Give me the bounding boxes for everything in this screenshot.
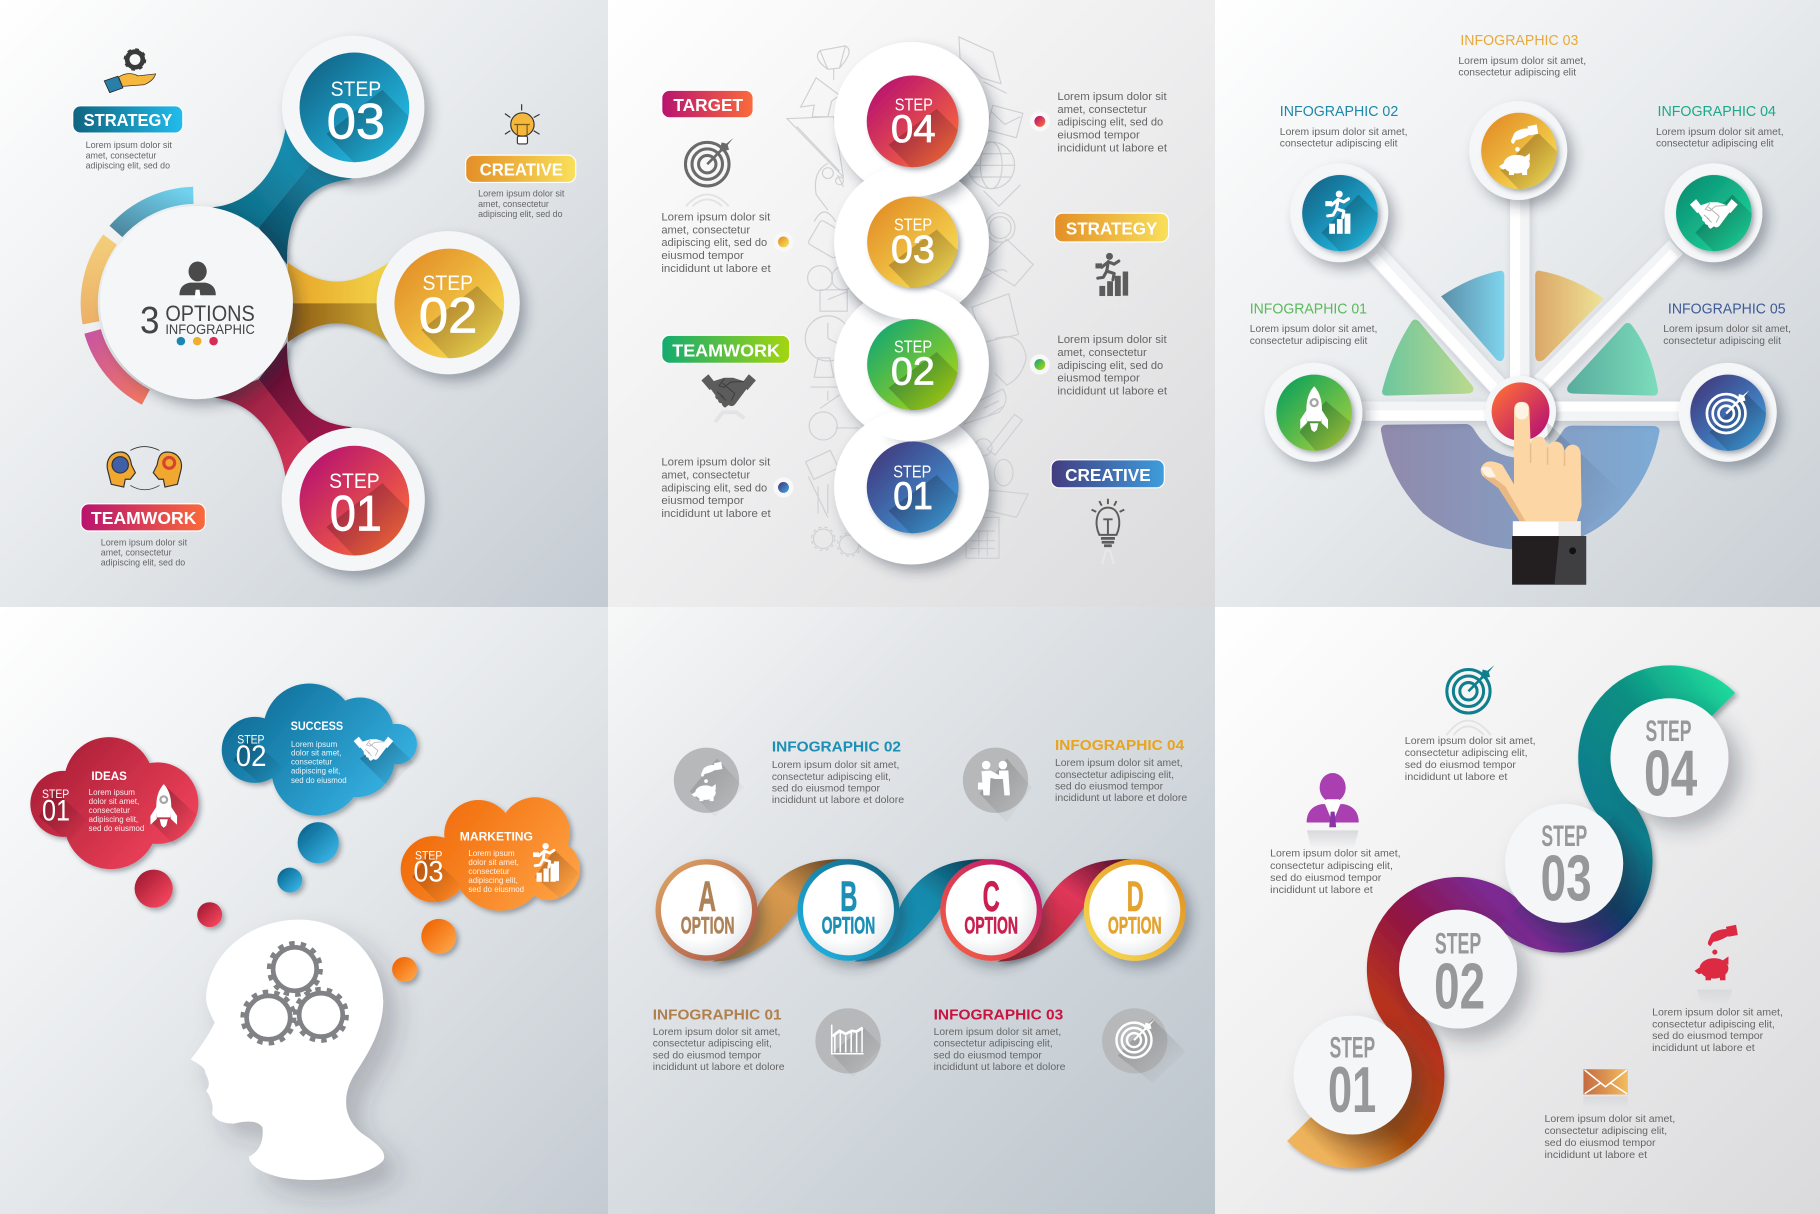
label: creative: CREATIVE: [480, 160, 563, 179]
text: infographic 01: INFOGRAPHIC 01: [1250, 301, 1367, 318]
text: left: sed do eiusmod tempor: [1270, 873, 1382, 884]
gears: [243, 943, 347, 1043]
text: top: consectetur adipiscing elit,: [1405, 748, 1527, 759]
step 01 button: STEP: [329, 469, 380, 493]
icon: envelope: [1583, 1069, 1628, 1107]
cloud: marketing: MARKETING: [460, 830, 533, 843]
step 03 button: STEP: [331, 77, 381, 101]
heading and text: infographic 03: INFOGRAPHIC 03: [934, 1008, 1063, 1024]
option C: OPTION: [964, 913, 1018, 940]
text: infographic 04: consectetur adipiscing elit: [1656, 139, 1774, 150]
cloud: ideas: adipiscing elit,: [89, 815, 138, 824]
label: target: [662, 90, 753, 118]
icon: light bulb: [505, 104, 540, 144]
heading and text: infographic 04: sed do eiusmod tempor: [1055, 782, 1164, 793]
text: right upper: incididunt ut labore et: [1057, 142, 1168, 154]
cloud: ideas: dolor sit amet,: [89, 797, 139, 806]
step 02 button: STEP: [422, 271, 473, 295]
option B: OPTION: [822, 913, 875, 940]
colored dots: [177, 337, 218, 345]
option C: C: [983, 873, 1000, 921]
step 04 badge: 04: [891, 108, 936, 151]
label: target: TARGET: [673, 96, 744, 115]
text: bottom: sed do eiusmod tempor: [1544, 1138, 1656, 1149]
dot: green: [1030, 354, 1050, 375]
text: infographic 04: Lorem ipsum dolor sit amet,: [1656, 127, 1784, 138]
text: right upper: eiusmod tempor: [1057, 129, 1140, 141]
panel background: metaball steps: [0, 0, 608, 607]
text: right upper: adipiscing elit, sed do: [1057, 117, 1163, 129]
step 02 badge: [867, 319, 981, 433]
label: strategy: STRATEGY: [84, 111, 173, 130]
panel: options ribbon: [653, 738, 1187, 1083]
heading and text: infographic 03: sed do eiusmod tempor: [934, 1050, 1042, 1061]
text: right upper: [1057, 91, 1168, 154]
text: right lower: adipiscing elit, sed do: [1057, 360, 1163, 372]
step 02 disc: [1399, 910, 1517, 1028]
heading and text: infographic 02: incididunt ut labore et dolore: [772, 795, 904, 806]
text: infographic 03: INFOGRAPHIC 03: [1460, 33, 1578, 49]
heading and text: infographic 04: incididunt ut labore et dolore: [1055, 793, 1187, 804]
ribbon: C to D: [997, 859, 1133, 962]
label: creative: [1051, 460, 1164, 488]
step 02 button: 02: [419, 288, 477, 344]
text: infographic 05: consectetur adipiscing elit: [1663, 336, 1781, 347]
text: infographic 01: consectetur adipiscing elit: [1250, 336, 1367, 347]
wedge: blue: [1441, 271, 1504, 361]
white chain circles: [834, 42, 989, 564]
option B: B: [840, 873, 857, 921]
step 01 badge: [867, 442, 981, 555]
step 01 disc: 01: [1328, 1053, 1376, 1126]
text: left lower: Lorem ipsum dolor sit: [661, 457, 771, 469]
text: left lower: incididunt ut labore et: [661, 508, 772, 520]
text: top: incididunt ut labore et: [1405, 772, 1508, 783]
central circle: [100, 206, 293, 399]
step 04 badge: [866, 75, 964, 173]
text: infographic 04: [1656, 104, 1784, 150]
text: left: incididunt ut labore et: [1270, 885, 1373, 896]
step 02 button: [377, 231, 533, 387]
cloud: ideas: consectetur: [89, 806, 130, 815]
center button: [1485, 376, 1556, 447]
option C: [940, 859, 1042, 961]
icon circle: business people: [963, 748, 1032, 823]
wedge: teal: [1567, 323, 1658, 396]
icon: hand with gear: [104, 50, 156, 93]
step 04 badge: STEP: [895, 95, 933, 114]
text: left lower: eiusmod tempor: [661, 495, 744, 507]
panel: five-spoke hand button: [1250, 33, 1791, 585]
text: infographic 03: consectetur adipiscing elit: [1458, 67, 1576, 78]
connector: step 02 gold: [288, 263, 389, 342]
spoke highlights: [1365, 198, 1682, 415]
panel background: hand button fan: [1215, 0, 1820, 607]
step 01 button: 01: [330, 486, 382, 542]
cloud: ideas: sed do eiusmod: [89, 824, 145, 833]
panel background: options ribbon: [608, 607, 1215, 1214]
text: top: sed do eiusmod tempor: [1405, 760, 1516, 771]
step 03 disc: STEP: [1541, 820, 1587, 853]
step 03 badge: 03: [891, 229, 935, 272]
heading and text: infographic 01: INFOGRAPHIC 01: [653, 1008, 782, 1024]
icon circle: piggy bank: [674, 748, 744, 817]
cloud: marketing: dolor sit amet,: [468, 858, 519, 867]
text: right lower: Lorem ipsum dolor sit: [1057, 334, 1168, 346]
text: teamwork body: amet, consectetur: [101, 547, 172, 557]
icon: target: [685, 138, 733, 206]
cloud: ideas: IDEAS: [91, 770, 127, 783]
text: top: [1405, 736, 1536, 783]
text: creative body: amet, consectetur: [478, 199, 549, 209]
text: infographic 02: INFOGRAPHIC 02: [1280, 104, 1398, 120]
central title: INFOGRAPHIC: [165, 321, 255, 337]
panel: vertical chain of steps: [661, 37, 1169, 564]
text: infographic 02: Lorem ipsum dolor sit amet,: [1280, 127, 1408, 138]
option D: OPTION: [1108, 913, 1162, 940]
text: infographic 03: [1458, 33, 1586, 78]
text: infographic 02: consectetur adipiscing elit: [1280, 139, 1398, 150]
text: top: Lorem ipsum dolor sit amet,: [1405, 736, 1536, 747]
cloud: ideas: 01: [42, 795, 70, 828]
icon: runner and bars: [1095, 253, 1128, 309]
heading and text: infographic 03: [934, 1008, 1066, 1073]
thought drops: red: [135, 870, 222, 927]
text: teamwork body: adipiscing elit, sed do: [101, 558, 185, 568]
heading and text: infographic 01: Lorem ipsum dolor sit amet,: [653, 1027, 780, 1038]
text: right lower: [1057, 334, 1168, 397]
text: right lower: eiusmod tempor: [1057, 373, 1140, 385]
text: left upper: incididunt ut labore et: [661, 263, 772, 275]
icon: light bulb: [1092, 499, 1124, 564]
connector: step 03 teal: [212, 126, 352, 265]
text: left upper: Lorem ipsum dolor sit: [661, 212, 771, 224]
thought drops: blue: [277, 822, 339, 892]
text: infographic 01: Lorem ipsum dolor sit amet,: [1250, 324, 1377, 335]
cloud: success: Lorem ipsum: [291, 740, 337, 749]
text: infographic 01: [1250, 301, 1377, 347]
central title: [140, 299, 255, 342]
text: teamwork body: [101, 537, 188, 568]
panel background: head and clouds: [0, 607, 608, 1214]
cloud: success: [222, 683, 417, 816]
dot: red: [1030, 111, 1050, 131]
head silhouette: [191, 920, 384, 1180]
icon circle: chart: [815, 1008, 882, 1077]
text: creative body: adipiscing elit, sed do: [478, 209, 562, 219]
icon: purple person: [1307, 773, 1359, 849]
heading and text: infographic 03: incididunt ut labore et dolore: [934, 1062, 1066, 1073]
step 01 badge: STEP: [893, 462, 931, 481]
text: left upper: amet, consectetur: [661, 224, 750, 236]
heading and text: infographic 02: consectetur adipiscing elit,: [772, 772, 891, 783]
arc: red: [93, 331, 146, 397]
cloud: ideas: STEP: [42, 788, 69, 801]
text: bottom: Lorem ipsum dolor sit amet,: [1544, 1114, 1675, 1125]
label: strategy: [1055, 213, 1169, 242]
heading and text: infographic 02: Lorem ipsum dolor sit amet,: [772, 760, 899, 771]
text: left upper: [661, 212, 772, 275]
text: right upper: amet, consectetur: [1057, 104, 1147, 116]
text: infographic 05: INFOGRAPHIC 05: [1668, 301, 1786, 318]
cloud: success: sed do eiusmod: [291, 776, 347, 785]
ribbon: A to B: [712, 859, 847, 962]
cloud: success: STEP: [237, 734, 265, 747]
spokes: [1358, 191, 1684, 411]
icon: handshake: [701, 374, 756, 422]
heading and text: infographic 03: Lorem ipsum dolor sit amet,: [934, 1027, 1061, 1038]
jacket sleeve: [1512, 536, 1586, 585]
label: teamwork: [662, 335, 790, 363]
doodle background: [787, 37, 1033, 558]
arc: yellow: [89, 240, 110, 323]
text: right: consectetur adipiscing elit,: [1652, 1019, 1775, 1030]
heading and text: infographic 01: incididunt ut labore et dolore: [653, 1062, 785, 1073]
option A: OPTION: [681, 913, 734, 940]
wedge: orange: [1535, 271, 1604, 361]
cloud: marketing: adipiscing elit,: [468, 876, 518, 885]
cloud: ideas: [30, 737, 198, 869]
heading and text: infographic 02: [772, 739, 904, 806]
label: creative: [466, 155, 576, 182]
half ring wedge: [1381, 424, 1660, 549]
hand shadow: [1547, 422, 1624, 533]
text: right upper: Lorem ipsum dolor sit: [1057, 91, 1168, 103]
heading and text: infographic 04: INFOGRAPHIC 04: [1055, 738, 1185, 754]
text: strategy body: [86, 140, 172, 170]
snake ribbon: [1299, 683, 1723, 1151]
cloud: ideas: Lorem ipsum: [89, 788, 135, 797]
text: left: [1270, 849, 1401, 896]
text: right lower: amet, consectetur: [1057, 347, 1147, 359]
dot: gold: [773, 232, 794, 252]
step 03 button: 03: [327, 93, 385, 149]
step 02 disc: 02: [1434, 949, 1485, 1022]
icon circle: target: [1102, 1008, 1186, 1083]
central title: OPTIONS: [165, 301, 255, 326]
option D: [1084, 859, 1186, 961]
step 03 disc: 03: [1541, 841, 1592, 914]
label: teamwork: TEAMWORK: [672, 341, 781, 360]
text: strategy body: Lorem ipsum dolor sit: [86, 140, 172, 150]
text: left upper: eiusmod tempor: [661, 250, 744, 262]
panel: 3 options metaball infographic: [73, 36, 576, 584]
circle 03 piggy bank: [1469, 101, 1577, 209]
text: right: Lorem ipsum dolor sit amet,: [1652, 1007, 1783, 1018]
heading and text: infographic 04: consectetur adipiscing elit,: [1055, 770, 1174, 781]
text: left upper: adipiscing elit, sed do: [661, 237, 767, 249]
cloud: success: 02: [236, 740, 266, 773]
step 03 button: [282, 36, 438, 191]
text: right: sed do eiusmod tempor: [1652, 1031, 1764, 1042]
step 02 disc: STEP: [1435, 927, 1481, 961]
text: strategy body: adipiscing elit, sed do: [86, 160, 170, 170]
option A: A: [698, 873, 716, 921]
arc: teal: [116, 195, 193, 231]
text: strategy body: amet, consectetur: [86, 150, 156, 160]
step 03 badge: STEP: [894, 216, 932, 235]
text: teamwork body: Lorem ipsum dolor sit: [101, 537, 188, 547]
dot: navy: [773, 477, 794, 498]
heading and text: infographic 04: [1055, 738, 1187, 804]
text: left: Lorem ipsum dolor sit amet,: [1270, 849, 1401, 860]
connector: step 01 red: [212, 342, 352, 478]
ribbon: B to C: [854, 859, 990, 962]
panel background: snake steps: [1215, 607, 1820, 1214]
text: right: [1652, 1007, 1783, 1054]
panel background: vertical chain: [608, 0, 1215, 607]
heading and text: infographic 01: sed do eiusmod tempor: [653, 1050, 761, 1061]
text: infographic 04: INFOGRAPHIC 04: [1658, 104, 1776, 120]
cloud: marketing: sed do eiusmod: [468, 885, 524, 894]
heading and text: infographic 02: INFOGRAPHIC 02: [772, 739, 901, 755]
circle 04 handshake: [1664, 163, 1772, 272]
label: creative: CREATIVE: [1065, 466, 1151, 485]
circle 02 runner: [1290, 163, 1398, 272]
label: teamwork: [81, 504, 205, 531]
text: infographic 05: Lorem ipsum dolor sit amet,: [1663, 324, 1791, 335]
text: bottom: [1544, 1114, 1675, 1161]
text: infographic 02: [1280, 104, 1408, 150]
cloud: success: dolor sit amet,: [291, 749, 342, 758]
text: infographic 05: [1663, 301, 1791, 347]
cloud: marketing: STEP: [415, 849, 442, 862]
pointing hand: [1481, 402, 1582, 521]
icon: red piggy bank: [1694, 925, 1738, 1005]
heading and text: infographic 04: Lorem ipsum dolor sit amet,: [1055, 758, 1183, 769]
circle 01 rocket: [1264, 363, 1372, 471]
panel: snake steps: [1270, 665, 1783, 1161]
text: bottom: consectetur adipiscing elit,: [1544, 1126, 1667, 1137]
step 01 badge: 01: [893, 475, 933, 518]
text: infographic 03: Lorem ipsum dolor sit amet,: [1458, 56, 1586, 67]
wedge: green: [1382, 320, 1474, 396]
text: left lower: [661, 457, 772, 520]
cloud: success: adipiscing elit,: [291, 767, 340, 776]
cloud: success: consectetur: [291, 758, 332, 767]
text: right: incididunt ut labore et: [1652, 1043, 1755, 1054]
shirt cuff: [1513, 521, 1581, 536]
step 01 button: [282, 428, 438, 584]
step 03 disc: [1505, 804, 1623, 923]
step 04 disc: 04: [1644, 736, 1697, 809]
cloud: marketing: Lorem ipsum: [468, 849, 515, 858]
label: strategy: STRATEGY: [1066, 220, 1158, 239]
central title: 3: [140, 299, 159, 342]
text: creative body: [478, 188, 565, 219]
step 01 disc: [1294, 1016, 1412, 1135]
option B: [797, 859, 899, 961]
icon: two heads: [107, 447, 182, 490]
heading and text: infographic 01: consectetur adipiscing elit,: [653, 1039, 772, 1050]
step 03 badge: [867, 196, 981, 310]
thought drops: orange: [392, 919, 456, 982]
step 04 disc: STEP: [1646, 715, 1691, 748]
text: left lower: adipiscing elit, sed do: [661, 482, 767, 494]
step 04 disc: [1610, 698, 1728, 817]
step 02 badge: 02: [891, 350, 935, 393]
cloud: marketing: [401, 797, 580, 911]
label: teamwork: TEAMWORK: [91, 509, 197, 528]
cloud: marketing: consectetur: [468, 867, 510, 876]
icon: teal target: [1446, 665, 1494, 735]
text: left lower: amet, consectetur: [661, 469, 750, 481]
text: left: consectetur adipiscing elit,: [1270, 861, 1393, 872]
label: strategy: [73, 106, 183, 133]
option D: D: [1127, 873, 1144, 921]
heading and text: infographic 01: [653, 1008, 785, 1073]
text: creative body: Lorem ipsum dolor sit: [478, 188, 565, 198]
option A: [656, 859, 757, 961]
heading and text: infographic 02: sed do eiusmod tempor: [772, 783, 880, 794]
step 02 badge: STEP: [894, 337, 932, 356]
icon: businessman: [179, 262, 216, 299]
text: bottom: incididunt ut labore et: [1544, 1150, 1647, 1161]
cloud: success: SUCCESS: [291, 720, 343, 733]
cloud: marketing: 03: [414, 856, 443, 889]
step 01 disc: STEP: [1330, 1032, 1375, 1065]
circle 05 target: [1679, 363, 1786, 471]
panel: head with thought clouds: [30, 683, 580, 1180]
heading and text: infographic 03: consectetur adipiscing elit,: [934, 1039, 1053, 1050]
text: right lower: incididunt ut labore et: [1057, 385, 1168, 397]
